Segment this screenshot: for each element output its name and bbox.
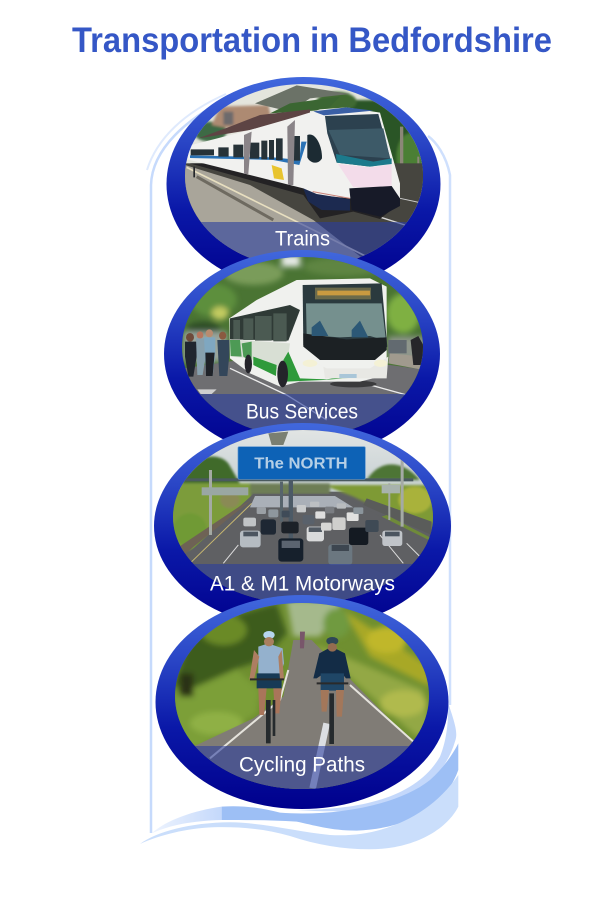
- ring: trains: [166, 77, 440, 291]
- panel: trains: [166, 77, 440, 291]
- label band: cycling: [195, 746, 409, 789]
- photo: bus and pedestrians: [182, 257, 423, 429]
- label band: bus: [200, 394, 405, 429]
- ribbon: bottom wave: [140, 703, 458, 849]
- ribbon background: [140, 94, 458, 849]
- label: A1 & M1 Motorways: A1 & M1 Motorways: [210, 572, 395, 596]
- cyclist left: [249, 631, 284, 743]
- label: Trains: Trains: [275, 226, 330, 250]
- bus: [330, 381, 377, 387]
- photo: train at station: [185, 84, 423, 258]
- ring: bus: [164, 250, 440, 458]
- ring: cycling: [156, 595, 448, 809]
- panel: motorways: [154, 423, 451, 629]
- pedestrians: [185, 329, 423, 377]
- cyclist right: [313, 637, 351, 744]
- label: Cycling Paths: Cycling Paths: [239, 752, 365, 776]
- label: Bus Services: Bus Services: [246, 400, 358, 424]
- ribbon: side rails and top curves: [147, 94, 450, 833]
- photo: cyclists on a path: [170, 600, 435, 796]
- train: [190, 163, 400, 219]
- sign text: The NORTH: [254, 456, 348, 473]
- label band: trains: [201, 222, 407, 258]
- title: Transportation in Bedfordshire: [72, 21, 552, 60]
- photo: motorway traffic and sign: [173, 430, 433, 600]
- panel: bus services: [164, 250, 440, 458]
- ring: motorways: [154, 423, 451, 629]
- cars: [240, 502, 402, 565]
- label band: motorways: [194, 564, 412, 600]
- panel: cycling paths: [156, 595, 448, 809]
